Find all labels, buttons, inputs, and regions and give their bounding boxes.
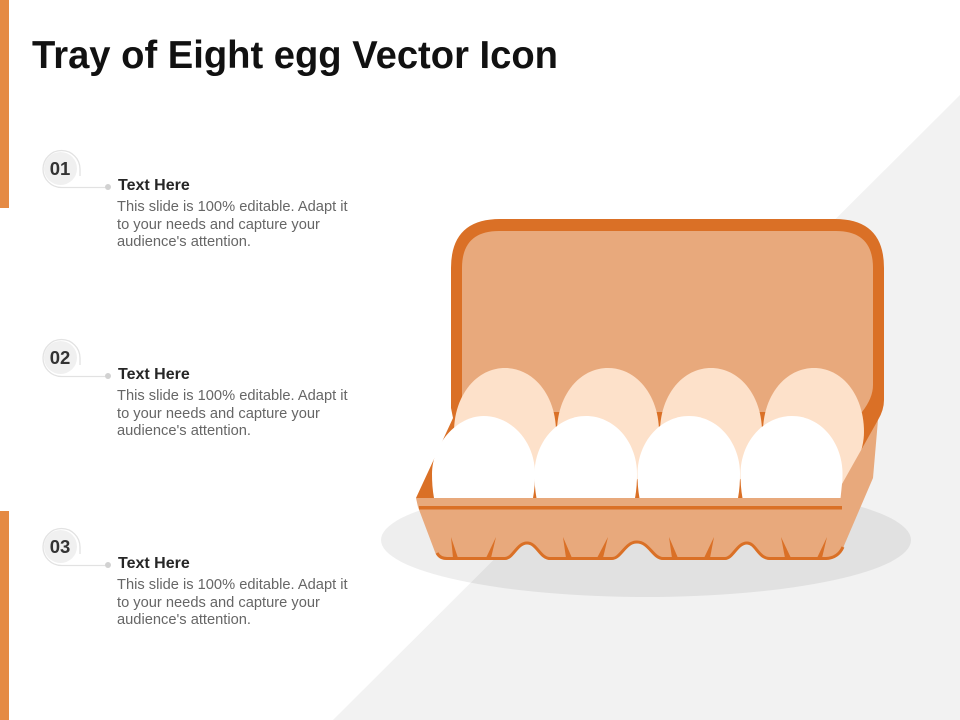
left accent bar bottom [0, 511, 9, 720]
back row eggs [454, 368, 864, 495]
body text 01: audience's attention. [117, 234, 251, 250]
tray bottom edge [437, 542, 843, 558]
title: Tray of Eight egg Vector Icon [32, 34, 558, 77]
badge 03 [43, 528, 111, 568]
body text 03: audience's attention. [117, 612, 251, 628]
tray lid [416, 219, 884, 498]
heading 01: Text Here [118, 177, 190, 194]
body text 02: to your needs and capture your [117, 406, 320, 422]
badge 01 [43, 151, 111, 190]
item 03 [43, 528, 348, 628]
ground shadow [381, 483, 911, 597]
body text 03: This slide is 100% editable. Adapt it [117, 577, 348, 593]
left accent bar top [0, 0, 9, 208]
badge 01: 01 [50, 158, 70, 179]
icon: egg tray [416, 219, 884, 560]
badge 02: 02 [50, 347, 70, 368]
body text 03: to your needs and capture your [117, 595, 320, 611]
lid inner panel [462, 231, 873, 412]
heading 03: Text Here [118, 555, 190, 572]
badge 02 [43, 340, 111, 379]
body text 01: to your needs and capture your [117, 217, 320, 233]
item 01 [43, 151, 348, 250]
body text 02: audience's attention. [117, 423, 251, 439]
tray front rim line [419, 506, 842, 510]
front row eggs [432, 416, 842, 498]
tray side flap [835, 420, 878, 552]
heading 02: Text Here [118, 366, 190, 383]
background diagonal panel [333, 95, 960, 720]
body text 02: This slide is 100% editable. Adapt it [117, 388, 348, 404]
body text 01: This slide is 100% editable. Adapt it [117, 199, 348, 215]
item 02 [43, 340, 348, 439]
tray notches [451, 537, 827, 558]
tray front [416, 498, 844, 560]
badge 03: 03 [50, 536, 70, 557]
